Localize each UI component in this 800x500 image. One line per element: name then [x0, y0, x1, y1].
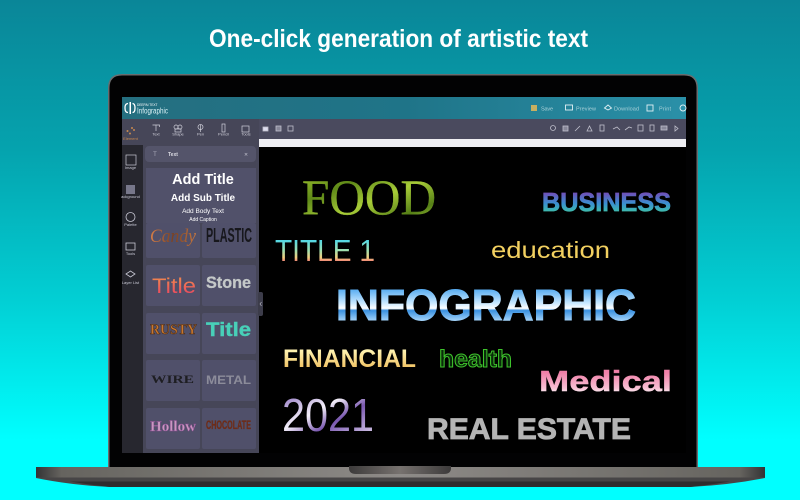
text panel header: × [244, 152, 248, 158]
text style presets: Stone [206, 273, 251, 292]
element tab [123, 127, 139, 141]
top tools: Text [152, 132, 161, 136]
top tools: Pen [197, 132, 204, 136]
element tab: Element [123, 136, 139, 141]
REAL ESTATE: REAL ESTATE [427, 413, 631, 446]
top tools: Tools [241, 132, 251, 136]
text panel header: T [153, 152, 157, 158]
top tools: Shape [172, 132, 185, 136]
tool rail top row [122, 119, 686, 453]
white ruler strip [259, 139, 686, 147]
title: One-click generation of artistic text [209, 25, 589, 53]
TITLE 1: TITLE 1 [275, 233, 375, 268]
education: education [491, 237, 610, 263]
header actions: Preview [576, 106, 596, 112]
header actions: Print [659, 106, 671, 112]
text style presets: METAL [206, 373, 251, 387]
top tools [152, 124, 251, 136]
text style presets: WIRE [151, 372, 194, 386]
left sidebar: Palette [124, 222, 138, 227]
FOOD: FOOD [302, 169, 436, 225]
top tools: Pencil [218, 132, 229, 136]
text panel header [145, 146, 256, 162]
left sidebar [121, 145, 143, 453]
add text options [146, 168, 256, 223]
BUSINESS: BUSINESS [542, 187, 671, 217]
text style presets: CHOCOLATE [206, 418, 251, 432]
panel collapse handle [258, 292, 263, 316]
text style presets: RUSTY [150, 322, 197, 338]
laptop bezel [110, 76, 696, 468]
header actions [531, 105, 686, 112]
header actions: Download [614, 106, 639, 112]
text style presets: Title [206, 320, 251, 341]
left sidebar: ackground [121, 194, 140, 199]
text style presets: Title [152, 275, 196, 298]
left sidebar: Image [125, 165, 137, 170]
INFOGRAPHIC: INFOGRAPHIC [336, 281, 636, 330]
laptop lid [108, 74, 698, 468]
left sidebar: Layer List [122, 280, 140, 285]
health: health [439, 346, 512, 373]
text style presets: Candy [150, 226, 197, 247]
canvas artistic text [259, 147, 686, 453]
laptop notch [349, 466, 451, 474]
text style presets [146, 223, 256, 449]
2021: 2021 [282, 389, 374, 441]
add text options: Add Caption [189, 217, 217, 223]
Medical: Medical [539, 366, 672, 398]
text style presets: Hollow [150, 419, 196, 435]
laptop base [36, 466, 765, 487]
app header bar [122, 97, 686, 119]
app logo: Infographic [137, 106, 168, 116]
app logo: DEEPAI TEXT [137, 103, 157, 107]
text style presets: PLASTIC [206, 225, 252, 247]
left sidebar: Tools [126, 251, 135, 256]
header actions: Save [541, 106, 553, 112]
FINANCIAL: FINANCIAL [283, 345, 416, 373]
text panel header: Text [168, 152, 178, 158]
add text options: Add Body Text [182, 208, 224, 215]
add text options: Add Title [172, 172, 234, 188]
editor toolbar icons [263, 125, 678, 131]
add text options: Add Sub Title [171, 193, 236, 204]
app logo [125, 102, 168, 116]
